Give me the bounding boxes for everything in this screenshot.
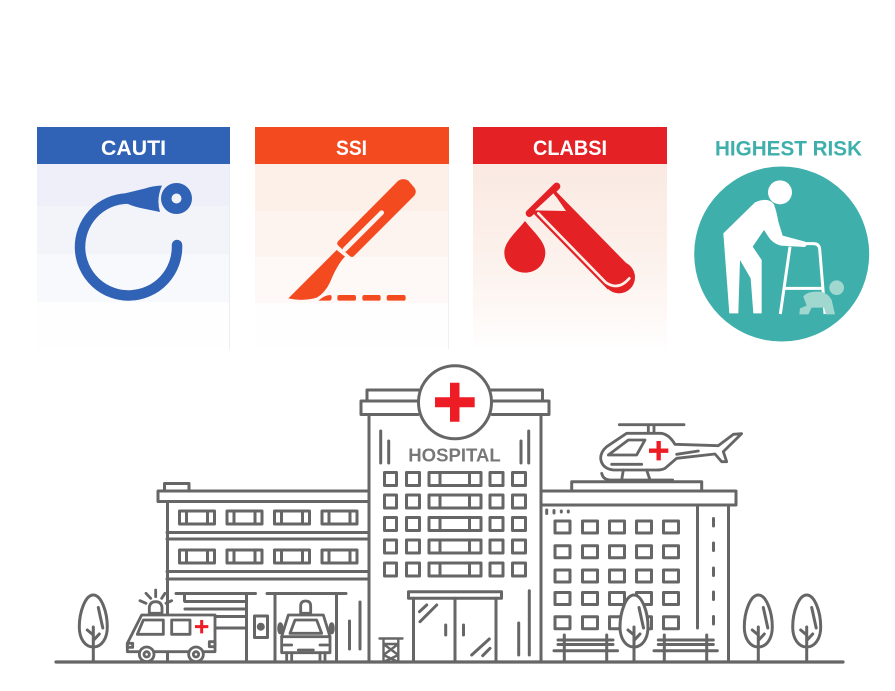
icon: ambulance — [127, 590, 215, 662]
hospital sign: HOSPITAL — [408, 445, 501, 466]
illustration: hospital scene — [56, 366, 843, 662]
heading: CLABSI: CLABSI — [533, 137, 607, 160]
icon: blood test tube — [504, 186, 635, 293]
icon: catheter — [80, 183, 192, 295]
heading: CLABSI — [473, 127, 667, 164]
ground line — [56, 660, 843, 664]
icon: tree 1 — [79, 595, 107, 662]
icon: helicopter — [601, 425, 742, 480]
panel: SSI — [255, 127, 449, 349]
heading: CAUTI — [37, 127, 230, 164]
helipad — [572, 482, 702, 491]
icon: tree 3 — [744, 595, 772, 662]
heading: SSI — [255, 127, 449, 164]
trash bin — [380, 638, 402, 662]
panel: CAUTI — [37, 127, 230, 349]
icon: tree 4 — [793, 595, 821, 662]
icon: red cross emblem — [418, 366, 492, 439]
left wing building — [158, 484, 369, 662]
icon: ambulance car front view — [279, 601, 333, 661]
icon: scalpel — [288, 179, 416, 301]
icon: highest risk patients — [694, 166, 869, 342]
panel: CLABSI — [473, 127, 667, 349]
heading: CAUTI: CAUTI — [101, 137, 166, 160]
hospital entrance — [408, 591, 529, 662]
benches — [554, 635, 717, 662]
heading: SSI: SSI — [336, 137, 367, 160]
right wing building — [541, 491, 736, 662]
main hospital tower — [361, 390, 549, 662]
heading: highest risk: HIGHEST RISK — [715, 138, 862, 160]
icon: tree 2 — [620, 595, 648, 662]
